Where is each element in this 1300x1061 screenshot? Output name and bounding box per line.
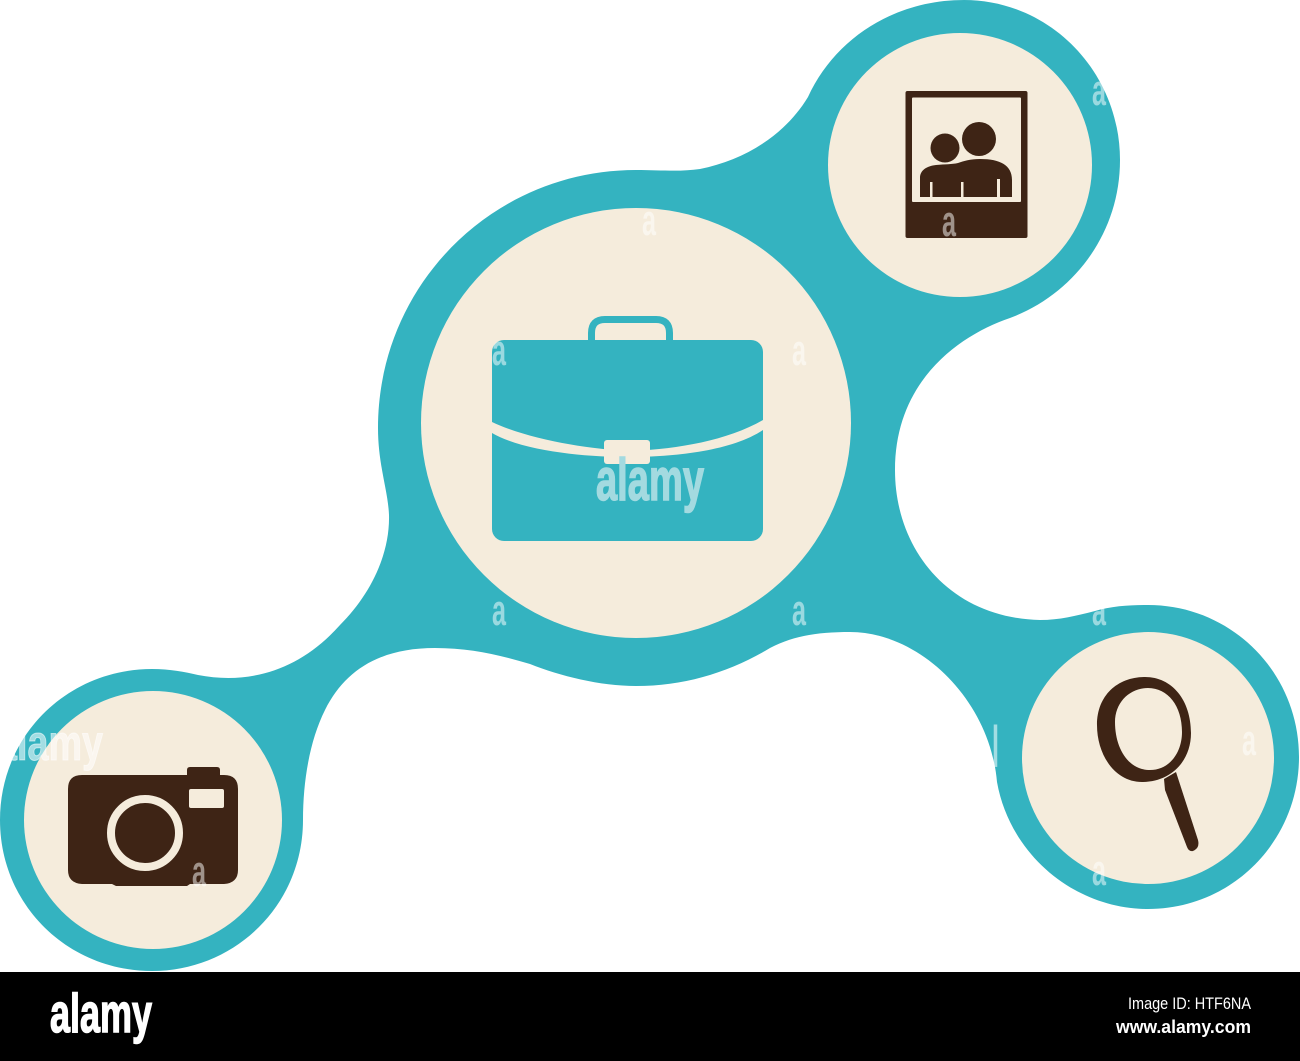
watermark text: l: [992, 715, 999, 780]
top right cream circle with portrait: [828, 33, 1092, 297]
watermark text: a: [492, 586, 506, 635]
icon: briefcase: [492, 320, 763, 541]
watermark text: [0, 66, 1256, 896]
watermark text: a: [192, 847, 206, 896]
watermark text: a: [1092, 66, 1106, 115]
watermark text: a: [1092, 846, 1106, 895]
watermark text: a: [1242, 716, 1256, 765]
watermark text: alamy: [0, 715, 103, 771]
watermark text: a: [1092, 586, 1106, 635]
watermark text: a: [792, 326, 806, 375]
icon: camera: [68, 767, 238, 886]
bottom left cream circle with camera: [24, 691, 282, 949]
central cream circle with briefcase: [421, 208, 851, 638]
watermark text: a: [792, 586, 806, 635]
watermark text: a: [642, 196, 656, 245]
icon: magnifying glass: [1097, 677, 1198, 851]
watermark text: a: [942, 197, 956, 246]
watermark text: a: [492, 326, 506, 375]
website: www.alamy.com: [1115, 1017, 1251, 1037]
bottom right cream circle with magnifier: [1022, 632, 1274, 884]
icon: instant photo of two people: [906, 91, 1028, 238]
footer bar: [0, 972, 1300, 1061]
watermark text: alamy: [596, 447, 704, 513]
image id: Image ID: HTF6NA: [1128, 994, 1252, 1013]
footer logo: alamy: [50, 982, 152, 1044]
